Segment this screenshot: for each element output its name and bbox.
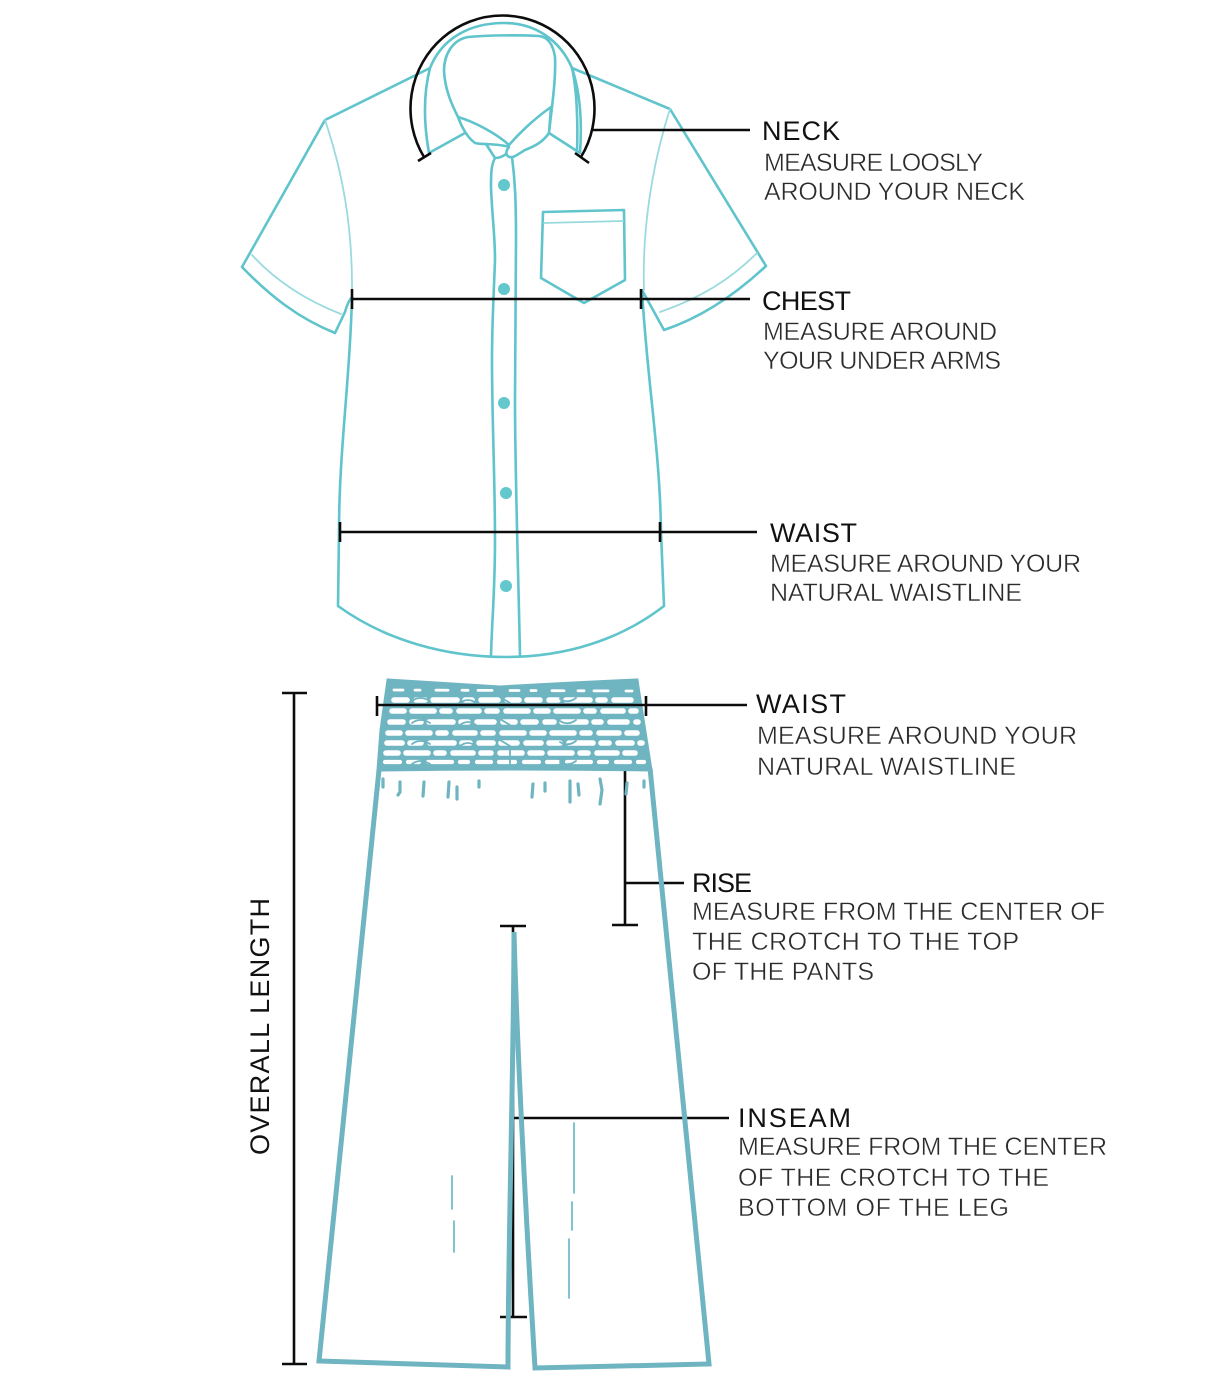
shirt waist label xyxy=(770,518,1081,607)
overall length label: OVERALL LENGTH xyxy=(245,898,275,1155)
inseam label: OF THE CROTCH TO THE xyxy=(738,1164,1049,1192)
rise label: THE CROTCH TO THE TOP xyxy=(692,928,1019,956)
right pant leg xyxy=(514,768,709,1368)
button placket xyxy=(491,157,520,656)
chest label: MEASURE AROUND xyxy=(763,318,997,346)
shirt waist measurement line xyxy=(340,522,757,542)
shirt body and sleeves outline xyxy=(242,68,766,657)
rise label: RISE xyxy=(692,868,752,898)
rise measurement line xyxy=(612,768,684,925)
overall length measurement line xyxy=(282,693,307,1364)
inseam measurement line xyxy=(500,926,729,1317)
illustration: short-sleeve shirt xyxy=(242,23,766,657)
pants waistband xyxy=(378,680,651,770)
neck label: AROUND YOUR NECK xyxy=(764,178,1025,206)
shirt waist label: MEASURE AROUND YOUR xyxy=(770,550,1081,578)
shirt waist label: WAIST xyxy=(770,518,857,548)
neck measurement arc xyxy=(411,16,750,163)
chest label xyxy=(762,286,1001,375)
rise label: MEASURE FROM THE CENTER OF xyxy=(692,898,1105,926)
inseam label: MEASURE FROM THE CENTER xyxy=(738,1133,1107,1161)
waistband gather marks xyxy=(383,779,644,804)
rise label xyxy=(692,868,1105,986)
chest label: YOUR UNDER ARMS xyxy=(763,347,1001,375)
inseam label: INSEAM xyxy=(738,1103,851,1133)
shirt waist label: NATURAL WAISTLINE xyxy=(770,579,1022,607)
pants waist label: NATURAL WAISTLINE xyxy=(757,753,1016,781)
inseam label xyxy=(738,1103,1107,1222)
collar xyxy=(425,23,581,158)
armhole and cuff seams xyxy=(252,109,757,314)
pants waist label xyxy=(756,689,1077,781)
waistband fabric folds xyxy=(412,697,576,768)
pants waist label: MEASURE AROUND YOUR xyxy=(757,722,1077,750)
pants waist label: WAIST xyxy=(756,689,846,719)
neck label xyxy=(762,116,1025,206)
neck label: MEASURE LOOSLY xyxy=(764,149,983,177)
buttons xyxy=(498,179,512,592)
chest pocket xyxy=(541,210,625,303)
chest measurement line xyxy=(352,289,750,309)
pants waist measurement line xyxy=(377,696,747,716)
neck label: NECK xyxy=(762,116,840,146)
inseam label: BOTTOM OF THE LEG xyxy=(738,1194,1009,1222)
leg fabric crease marks xyxy=(452,1123,574,1298)
illustration: drawstring pants xyxy=(319,680,709,1368)
left pant leg xyxy=(319,770,514,1367)
rise label: OF THE PANTS xyxy=(692,958,874,986)
chest label: CHEST xyxy=(762,286,851,316)
